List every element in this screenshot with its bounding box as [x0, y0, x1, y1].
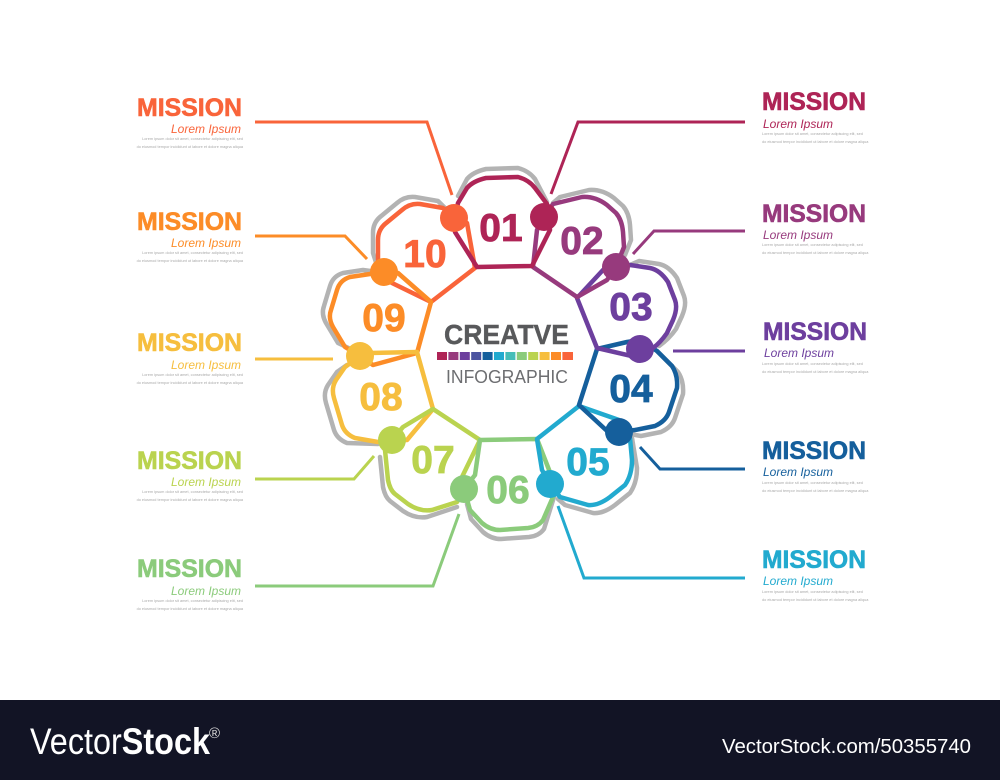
center title: INFOGRAPHIC — [446, 367, 568, 387]
petal numbers — [359, 207, 653, 512]
left text block 2: MISSION — [137, 208, 242, 236]
petal 05 — [537, 406, 632, 505]
left text block 1: Lorem ipsum dolor sit amet, consectetur adipiscing elit, sed — [142, 137, 243, 141]
right text block 3: MISSION — [763, 318, 867, 346]
rainbow colour bar — [437, 352, 573, 360]
connector lines — [255, 122, 745, 586]
left text block 2 — [137, 208, 244, 263]
right text block 3: do eiusmod tempor incididunt ut labore et dolore magna aliqua — [762, 370, 869, 374]
gray petal shadows — [323, 168, 685, 539]
right text block 1 — [762, 88, 869, 144]
right text block 2: MISSION — [762, 200, 866, 228]
center title — [437, 319, 573, 387]
right text block 3: Lorem ipsum dolor sit amet, consectetur adipiscing elit, sed — [762, 362, 863, 366]
petal 10 — [378, 204, 475, 302]
right text block 4: do eiusmod tempor incididunt ut labore et dolore magna aliqua — [762, 489, 869, 493]
right text block 4: Lorem Ipsum — [763, 465, 833, 479]
petal numbers: 03 — [609, 286, 653, 329]
petal numbers: 06 — [486, 469, 530, 512]
right text block 4: MISSION — [762, 437, 866, 465]
petal numbers: 10 — [403, 233, 447, 276]
left text block 2: Lorem Ipsum — [171, 236, 241, 250]
right text block 5 — [762, 546, 869, 602]
left text block 5: Lorem Ipsum — [171, 584, 241, 598]
footer id: VectorStock.com/50355740 — [722, 736, 971, 758]
right text block 5: Lorem Ipsum — [763, 574, 833, 588]
left text block 4 — [137, 447, 244, 502]
left text block 3: Lorem ipsum dolor sit amet, consectetur adipiscing elit, sed — [142, 373, 243, 377]
petal numbers: 07 — [411, 439, 455, 482]
right text block 5: do eiusmod tempor incididunt ut labore et dolore magna aliqua — [762, 598, 869, 602]
left text block 1 — [137, 94, 244, 149]
right text block 4: Lorem ipsum dolor sit amet, consectetur adipiscing elit, sed — [762, 481, 863, 485]
right text block 4 — [762, 437, 869, 493]
right text block 3: Lorem Ipsum — [764, 346, 834, 360]
left text block 3: do eiusmod tempor incididunt ut labore et dolore magna aliqua — [137, 381, 244, 385]
right text block 2: Lorem Ipsum — [763, 228, 833, 242]
petal 04 — [579, 340, 677, 432]
left text block 3: MISSION — [137, 329, 242, 357]
right text block 2: Lorem ipsum dolor sit amet, consectetur adipiscing elit, sed — [762, 243, 863, 247]
petal numbers: 05 — [566, 441, 610, 484]
right text block 1: MISSION — [762, 88, 866, 116]
footer logo: VectorStock — [30, 721, 210, 762]
petal 09 — [330, 272, 431, 365]
petal numbers: 09 — [362, 297, 406, 340]
left text block 4: Lorem Ipsum — [171, 475, 241, 489]
left text block 1: do eiusmod tempor incididunt ut labore et dolore magna aliqua — [137, 145, 244, 149]
petal 06 — [464, 439, 553, 530]
left text block 5: Lorem ipsum dolor sit amet, consectetur adipiscing elit, sed — [142, 599, 243, 603]
left text block 5: do eiusmod tempor incididunt ut labore et dolore magna aliqua — [137, 607, 244, 611]
right text block 2 — [762, 200, 869, 255]
left text block 2: do eiusmod tempor incididunt ut labore et dolore magna aliqua — [137, 259, 244, 263]
right text block 1: Lorem ipsum dolor sit amet, consectetur adipiscing elit, sed — [762, 132, 863, 136]
petal numbers: 04 — [609, 368, 653, 411]
left text block 1: Lorem Ipsum — [171, 122, 241, 136]
left text block 1: MISSION — [137, 94, 242, 122]
flower of ten numbered petals — [330, 177, 677, 530]
left text block 5 — [137, 555, 244, 611]
right text block 5: Lorem ipsum dolor sit amet, consectetur adipiscing elit, sed — [762, 590, 863, 594]
left text block 4: Lorem ipsum dolor sit amet, consectetur adipiscing elit, sed — [142, 490, 243, 494]
left text block 4: do eiusmod tempor incididunt ut labore et dolore magna aliqua — [137, 498, 244, 502]
right text block 3 — [762, 318, 869, 374]
petal numbers: 08 — [359, 376, 403, 419]
petal numbers: 01 — [479, 207, 523, 250]
left text block 3 — [137, 329, 244, 385]
petal 08 — [333, 352, 433, 442]
petal 07 — [385, 409, 480, 510]
footer bar — [0, 700, 1000, 780]
left text block 5: MISSION — [137, 555, 242, 583]
right text block 1: Lorem Ipsum — [763, 117, 833, 131]
node dots — [346, 203, 654, 503]
petal 03 — [577, 265, 676, 358]
right text block 5: MISSION — [762, 546, 866, 574]
left text block 3: Lorem Ipsum — [171, 358, 241, 372]
center title: CREATVE — [444, 319, 569, 350]
petal numbers: 02 — [560, 220, 604, 263]
registered mark: ® — [209, 725, 220, 742]
right text block 1: do eiusmod tempor incididunt ut labore et dolore magna aliqua — [762, 140, 869, 144]
left text block 4: MISSION — [137, 447, 242, 475]
petal 02 — [533, 197, 624, 297]
left text block 2: Lorem ipsum dolor sit amet, consectetur adipiscing elit, sed — [142, 251, 243, 255]
petal 01 — [455, 177, 550, 267]
right text block 2: do eiusmod tempor incididunt ut labore et dolore magna aliqua — [762, 251, 869, 255]
